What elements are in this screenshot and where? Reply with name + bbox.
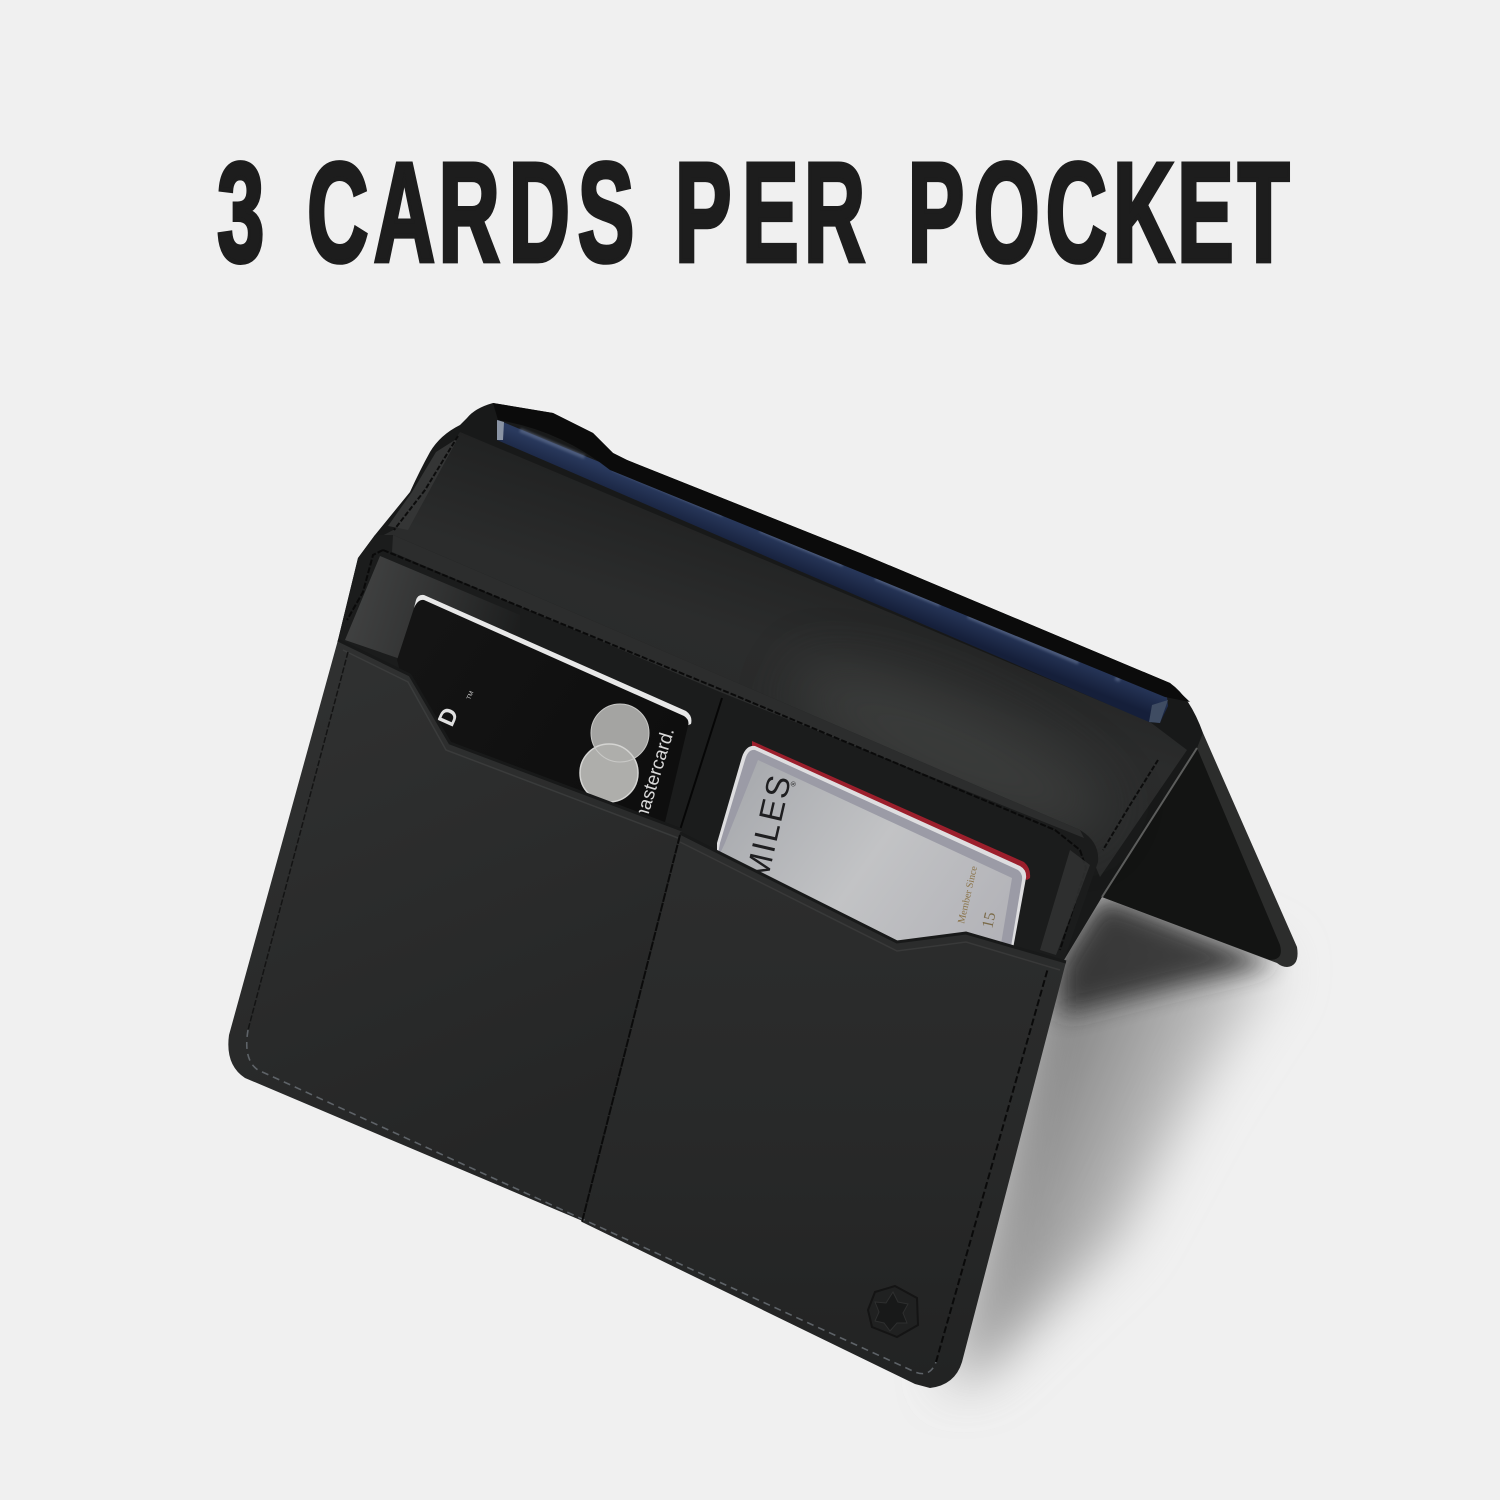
silver miles card bbox=[717, 741, 1030, 965]
black strap above passport bbox=[493, 403, 1190, 702]
lining stitching bbox=[383, 550, 1086, 950]
embossed logo bbox=[868, 1286, 918, 1337]
year text: 15 bbox=[979, 910, 999, 930]
flap leather highlight bbox=[776, 639, 1124, 861]
wallet product illustration bbox=[228, 403, 1298, 1388]
member since text: Member Since bbox=[956, 865, 980, 925]
right pocket bbox=[582, 833, 1066, 1388]
inner stitched lining bbox=[338, 535, 1098, 1000]
card coin logo bbox=[580, 704, 649, 802]
black mastercard card bbox=[397, 595, 691, 835]
navy passport bbox=[493, 403, 1190, 723]
mastercard wordmark: mastercard. bbox=[630, 725, 679, 827]
card logo mark: D bbox=[433, 704, 465, 730]
flap stitching bbox=[1103, 760, 1158, 850]
miles wordmark: MILES bbox=[738, 770, 798, 885]
trademark mark: TM bbox=[466, 690, 475, 701]
flap right edge highlight bbox=[1102, 748, 1197, 897]
upper flap bbox=[338, 403, 1203, 960]
panel stitching bbox=[247, 652, 1048, 1374]
registered mark: ® bbox=[789, 780, 798, 787]
passport edge highlights bbox=[520, 430, 1120, 680]
lining gloss right bbox=[1040, 850, 1090, 955]
title: 3 CARDS PER POCKET bbox=[217, 134, 1289, 291]
left pocket bbox=[228, 640, 682, 1222]
floor shadow bbox=[950, 880, 1280, 1385]
flap left edge band bbox=[388, 438, 458, 530]
back leaf of wallet bbox=[1102, 733, 1298, 967]
lining centre seam bbox=[680, 698, 722, 830]
